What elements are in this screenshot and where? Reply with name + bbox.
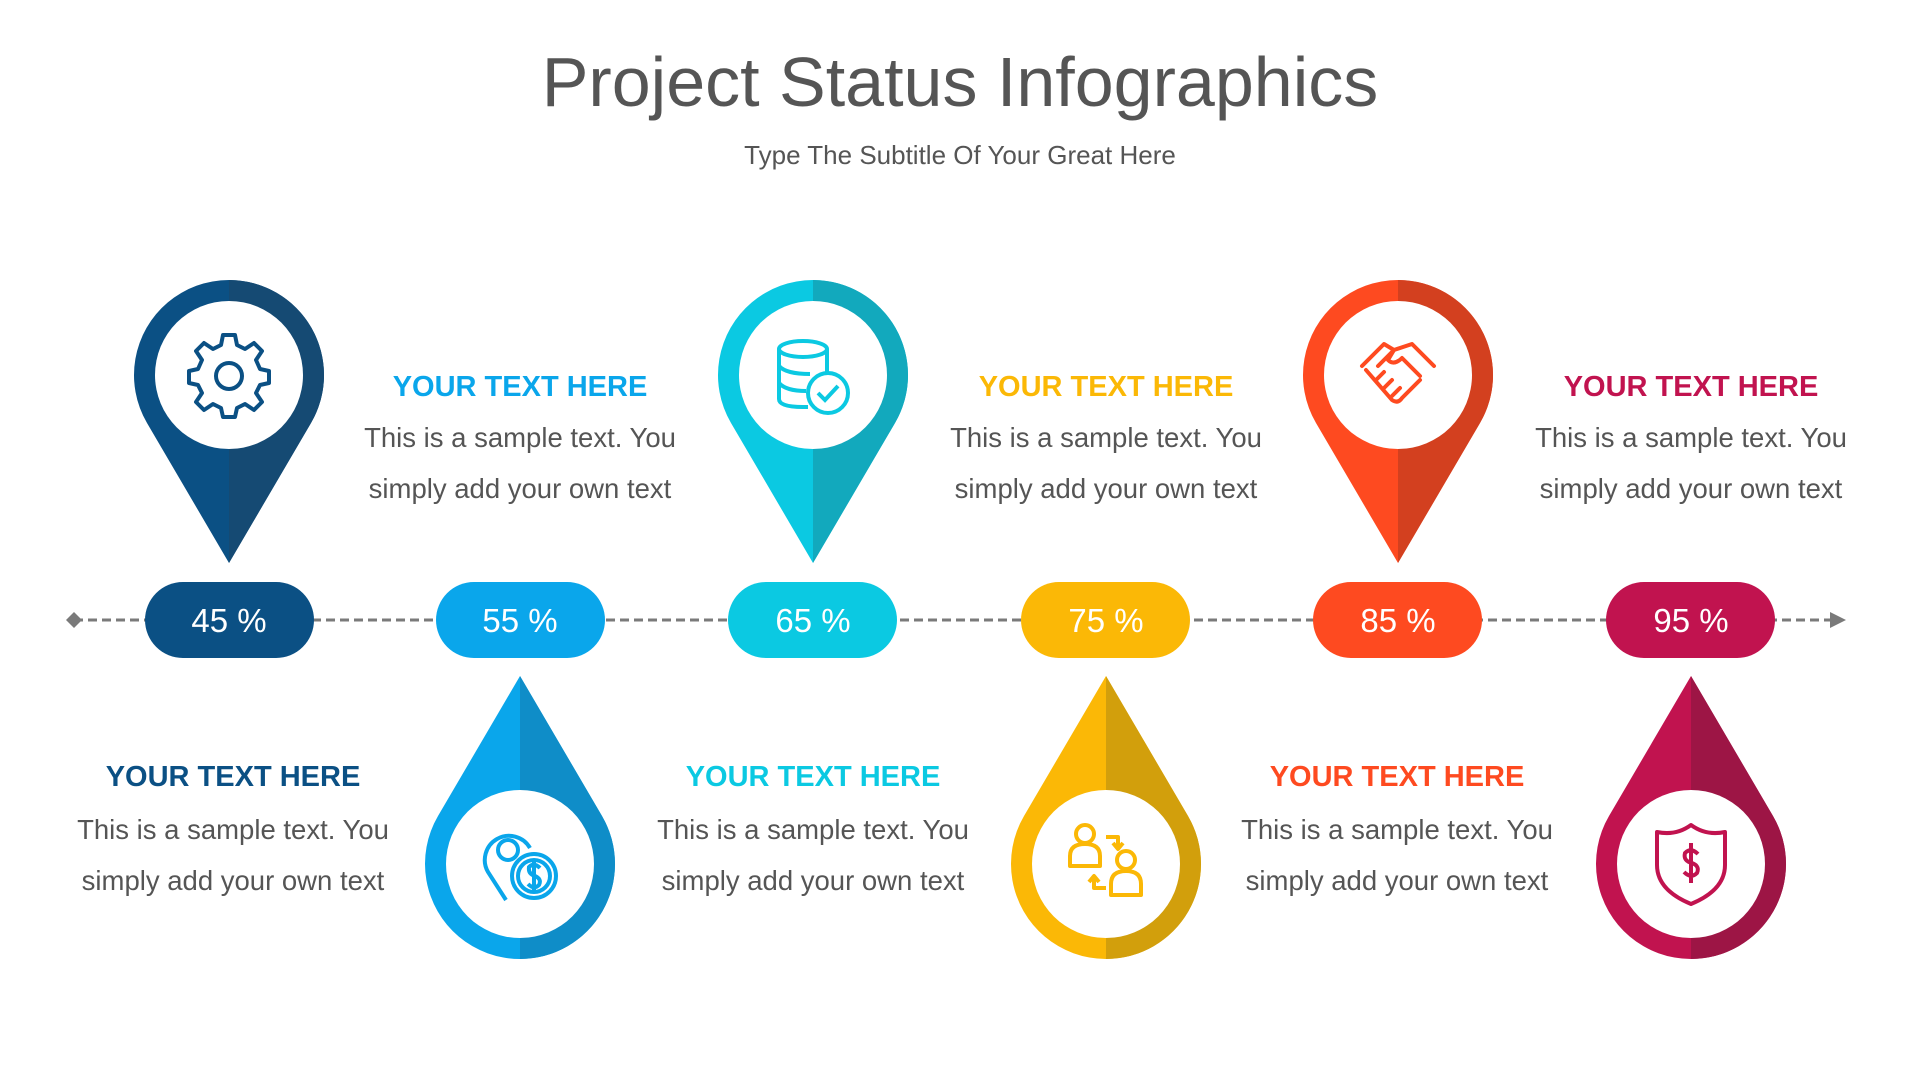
text block bottom 3: This is a sample text. You	[1241, 814, 1553, 845]
text block top 3: simply add your own text	[1540, 473, 1843, 504]
icon: handshake	[1362, 344, 1434, 402]
pill 85%	[1313, 582, 1482, 658]
text block bottom 2: YOUR TEXT HERE	[686, 761, 940, 793]
icon: pin with dollar	[485, 836, 556, 900]
pill 65%: 65 %	[775, 602, 851, 639]
text block top 2	[950, 371, 1262, 504]
pills	[145, 582, 1775, 658]
text block top 1: simply add your own text	[369, 473, 672, 504]
text block bottom 2: This is a sample text. You	[657, 814, 969, 845]
text block bottom 1: YOUR TEXT HERE	[106, 761, 360, 793]
text block top 2: This is a sample text. You	[950, 422, 1262, 453]
text block bottom 2: simply add your own text	[662, 865, 965, 896]
pill 95%	[1606, 582, 1775, 658]
text block bottom 1	[77, 761, 389, 896]
title: Project Status Infographics	[542, 43, 1378, 121]
pin 5: orange handshake	[1303, 280, 1493, 563]
text block top 3: YOUR TEXT HERE	[1564, 371, 1818, 403]
text block bottom 1: This is a sample text. You	[77, 814, 389, 845]
pill 75%	[1021, 582, 1190, 658]
pill 55%	[436, 582, 605, 658]
text block top 1: YOUR TEXT HERE	[393, 371, 647, 403]
text block top 2: simply add your own text	[955, 473, 1258, 504]
icon: database check	[779, 341, 848, 413]
text block bottom 3: YOUR TEXT HERE	[1270, 761, 1524, 793]
text block bottom 3: simply add your own text	[1246, 865, 1549, 896]
drop 6: crimson shield	[1596, 676, 1786, 959]
subtitle: Type The Subtitle Of Your Great Here	[744, 140, 1176, 170]
text block top 1: This is a sample text. You	[364, 422, 676, 453]
drop 4: yellow people exchange	[1011, 676, 1201, 959]
pill 75%: 75 %	[1068, 602, 1144, 639]
text block bottom 1: simply add your own text	[82, 865, 385, 896]
icon: shield dollar	[1657, 825, 1725, 904]
pill 55%: 55 %	[482, 602, 558, 639]
text block top 2: YOUR TEXT HERE	[979, 371, 1233, 403]
pill 45%: 45 %	[191, 602, 267, 639]
text block top 3: This is a sample text. You	[1535, 422, 1847, 453]
text block bottom 3	[1241, 761, 1553, 896]
icon: people exchange	[1070, 825, 1141, 895]
text block top 3	[1535, 371, 1847, 504]
pill 85%: 85 %	[1360, 602, 1436, 639]
text block bottom 2	[657, 761, 969, 896]
text block top 1	[364, 371, 676, 504]
timeline arrow	[66, 612, 1846, 628]
pin 1: navy gear	[134, 280, 324, 563]
pill 95%: 95 %	[1653, 602, 1729, 639]
drop 2: blue location money	[425, 676, 615, 959]
icon: gear	[189, 335, 269, 417]
pill 65%	[728, 582, 897, 658]
pin 3: cyan database	[718, 280, 908, 563]
pill 45%	[145, 582, 314, 658]
